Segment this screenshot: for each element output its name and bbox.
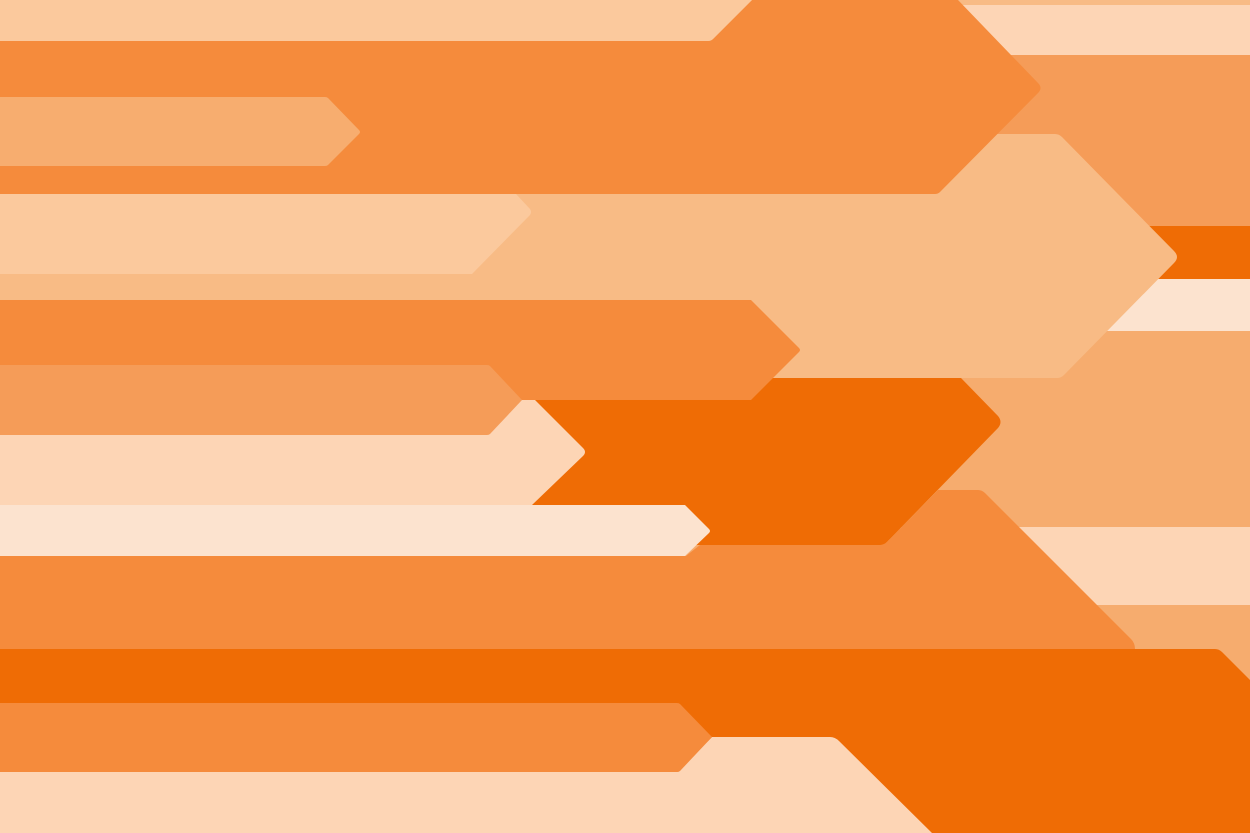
dark orange centre arrow [0, 378, 1000, 545]
dark orange bottom shape [0, 649, 1250, 833]
top light bar [0, 0, 752, 41]
background stripes on the right [900, 0, 1250, 705]
peach arrow middle [0, 400, 585, 505]
small arrow upper left [0, 97, 360, 166]
mid orange lower band arrow [0, 490, 1135, 660]
palest arrow [0, 505, 710, 556]
peach bottom arrow [0, 737, 932, 833]
light arrow under top shape [0, 194, 531, 274]
large mid orange arrow at top [0, 0, 1040, 194]
soft orange arrow middle left [0, 365, 522, 435]
mid orange arrow bottom left [0, 703, 712, 772]
mid orange arrow middle [0, 300, 800, 400]
large pale orange arrow [0, 134, 1177, 378]
